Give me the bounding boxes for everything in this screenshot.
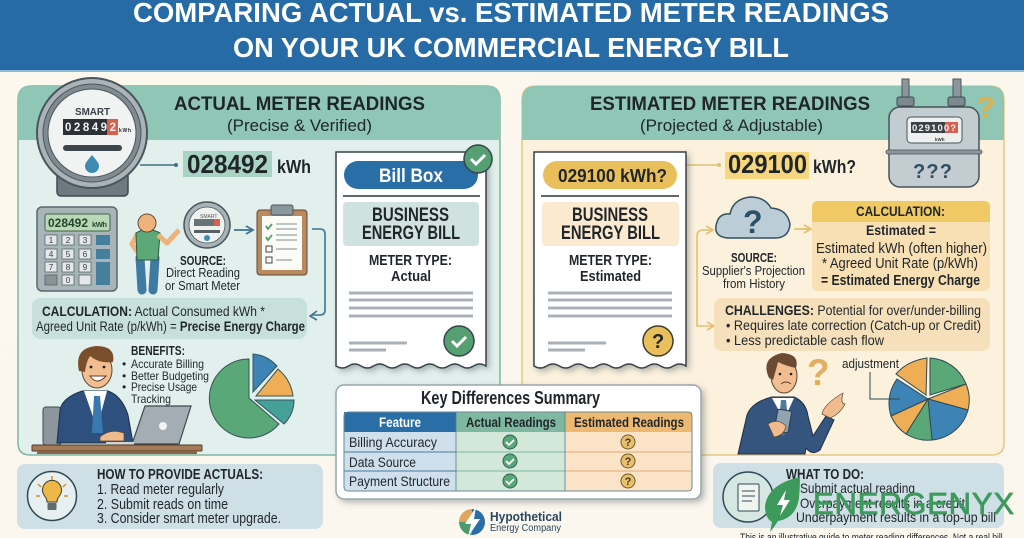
watermark: energenyx: ENERGENYX bbox=[813, 486, 1014, 521]
label: adjustment: adjustment bbox=[842, 357, 899, 371]
heading: summary: Key Differences Summary bbox=[421, 388, 600, 408]
title: ON YOUR UK COMMERCIAL ENERGY BILL bbox=[233, 32, 789, 63]
challenges box: CHALLENGES: Potential for over/under-billing bbox=[725, 302, 981, 318]
icon: calculator: 7 bbox=[49, 262, 54, 272]
bill: estimated bbox=[534, 152, 686, 368]
text: source estimated bbox=[702, 251, 805, 291]
text: what to do bbox=[786, 467, 996, 525]
icon: worried businessman bbox=[738, 353, 845, 454]
heading: actual: ACTUAL METER READINGS bbox=[174, 94, 425, 115]
pie chart: actual bbox=[209, 354, 294, 438]
icon: person reading meter bbox=[132, 214, 179, 290]
calculation box: actual bbox=[32, 298, 307, 339]
pill: bill box bbox=[344, 161, 478, 189]
icon: question mark: ? bbox=[977, 92, 995, 124]
text: meter type actual: METER TYPE: bbox=[369, 252, 452, 269]
block: bill title: BUSINESS bbox=[372, 205, 449, 226]
list: benefits: • bbox=[122, 380, 126, 394]
calculation box: actual: Agreed Unit Rate (p/kWh) = Precise Energy Charge bbox=[36, 319, 305, 334]
header banner bbox=[0, 0, 1024, 72]
logo: hypothetical energy company: Energy Company bbox=[490, 523, 561, 534]
icon: question badge: ? bbox=[652, 331, 664, 353]
list: benefits: • bbox=[122, 357, 126, 371]
icon: desk bbox=[32, 445, 202, 454]
watermark: energenyx bbox=[765, 477, 1014, 532]
text: how to provide actuals: HOW TO PROVIDE ACTUALS: bbox=[97, 467, 263, 483]
icon: clipboard bbox=[257, 205, 307, 275]
arrow: challenges to cloud bbox=[697, 226, 714, 330]
text: source estimated: SOURCE: bbox=[731, 251, 777, 265]
calculation box: estimated: CALCULATION: bbox=[856, 203, 945, 219]
text: source actual bbox=[165, 254, 240, 293]
icon: calculator: 6 bbox=[83, 249, 88, 259]
arrow: clipboard to calculation bbox=[310, 229, 325, 320]
table: comparison: ? bbox=[625, 476, 632, 488]
icon: small meter bbox=[184, 202, 230, 248]
list: benefits: Precise Usage bbox=[131, 380, 197, 394]
reading: estimated kWh: kWh? bbox=[813, 157, 856, 177]
text: what to do: WHAT TO DO: bbox=[786, 467, 864, 483]
icon: document and pen bbox=[723, 472, 773, 522]
text: how to provide actuals: 3. Consider smart meter upgrade. bbox=[97, 511, 281, 527]
challenges box bbox=[714, 298, 990, 351]
pie chart: estimated bbox=[870, 358, 969, 440]
table: comparison: Data Source bbox=[349, 454, 416, 470]
calculation box: estimated: * Agreed Unit Rate (p/kWh) bbox=[822, 256, 978, 272]
text: meter type estimated: Estimated bbox=[580, 268, 641, 285]
heading: actual: (Precise & Verified) bbox=[227, 116, 372, 135]
table: comparison: Estimated Readings bbox=[574, 414, 684, 430]
icon: smart meter: SMART bbox=[75, 106, 111, 118]
heading: estimated bbox=[590, 94, 870, 135]
calculation box: estimated bbox=[812, 201, 990, 291]
table: comparison: Payment Structure bbox=[349, 473, 450, 489]
calculation box: estimated: Estimated = bbox=[866, 222, 936, 238]
block: bill title bbox=[542, 202, 679, 246]
icon: smart meter: kWh bbox=[119, 128, 131, 134]
panel: key differences summary bbox=[336, 385, 701, 499]
reading: estimated kWh bbox=[725, 149, 856, 179]
table: comparison: Actual Readings bbox=[466, 414, 556, 430]
icon: gas meter bbox=[886, 79, 982, 187]
title bbox=[133, 0, 889, 63]
list: benefits: • bbox=[122, 369, 126, 383]
text: what to do: Overpayment results in a credit bbox=[800, 495, 965, 511]
text: how to provide actuals: 1. Read meter regularly bbox=[97, 482, 225, 498]
icon: small meter: SMART bbox=[200, 214, 217, 220]
list: benefits: Better Budgeting bbox=[131, 369, 209, 383]
pill: estimated kWh bbox=[543, 161, 677, 189]
icon: check badge bottom bbox=[444, 326, 474, 356]
table: comparison bbox=[344, 412, 692, 491]
icon: calculator: 8 bbox=[66, 262, 71, 272]
block: bill title bbox=[343, 202, 479, 246]
icon: calculator: 5 bbox=[66, 249, 71, 259]
challenges box: • Less predictable cash flow bbox=[726, 332, 885, 348]
list: benefits: Tracking bbox=[131, 392, 171, 406]
icon: calculator: 2 bbox=[66, 235, 71, 245]
icon: calculator: 0 bbox=[66, 275, 71, 285]
text: what to do: • bbox=[786, 480, 791, 496]
text: source estimated: from History bbox=[723, 277, 786, 291]
reading: actual kWh: kWh bbox=[277, 157, 311, 177]
panel: actual meter readings bbox=[18, 78, 500, 455]
icon: leaf bolt bbox=[765, 477, 800, 532]
logo: hypothetical energy company bbox=[459, 507, 562, 537]
arrow: meter to clipboard bbox=[234, 226, 253, 234]
icon: smart meter: 028492 bbox=[65, 122, 116, 134]
text: source actual: Direct Reading bbox=[166, 266, 240, 280]
heading: actual bbox=[174, 94, 425, 135]
icon: calculator: 9 bbox=[83, 262, 88, 272]
icon: gas meter: 029100? bbox=[912, 123, 956, 134]
text: what to do: Submit actual reading bbox=[800, 480, 915, 496]
reading: actual kWh: 028492 bbox=[187, 149, 268, 179]
block: bill title: BUSINESS bbox=[572, 205, 648, 226]
icon: cloud: ? bbox=[743, 204, 763, 240]
text: how to provide actuals bbox=[97, 467, 281, 527]
icon: laptop bbox=[106, 406, 191, 445]
block: bill title: ENERGY BILL bbox=[362, 223, 460, 244]
list: benefits: BENEFITS: bbox=[131, 344, 185, 358]
heading: estimated: ESTIMATED METER READINGS bbox=[590, 94, 870, 115]
connector: meter to reading bbox=[140, 163, 178, 167]
icon: calculator: 4 bbox=[49, 249, 54, 259]
icon: check badge top bbox=[464, 145, 492, 173]
text: source actual: or Smart Meter bbox=[165, 279, 240, 293]
calculation box: estimated: = Estimated Energy Charge bbox=[821, 273, 980, 289]
panel: what to do bbox=[713, 463, 1004, 528]
table: comparison: Billing Accuracy bbox=[349, 434, 437, 450]
icon: smart meter bbox=[37, 78, 147, 196]
icon: calculator: 1 bbox=[49, 235, 54, 245]
icon: businessman at laptop bbox=[43, 346, 133, 445]
list: benefits bbox=[122, 344, 209, 406]
arrow: cloud to calculation bbox=[794, 225, 811, 233]
table: comparison: ? bbox=[625, 437, 632, 449]
icon: calculator: 3 bbox=[83, 235, 88, 245]
text: how to provide actuals: 2. Submit reads on time bbox=[97, 497, 228, 513]
heading: estimated: (Projected & Adjustable) bbox=[640, 116, 823, 135]
text: what to do: Underpayment results in a top-up bill bbox=[796, 509, 996, 525]
text: what to do: • bbox=[786, 495, 791, 511]
pill: bill box: Bill Box bbox=[379, 166, 443, 187]
text: meter type actual: Actual bbox=[391, 268, 431, 285]
text: meter type estimated bbox=[569, 252, 652, 285]
calculation box: actual: CALCULATION: Actual Consumed kWh * bbox=[42, 304, 266, 319]
pill: estimated kWh: 029100 kWh? bbox=[558, 166, 667, 186]
connector: bill to estimated reading bbox=[687, 163, 721, 167]
reading: actual kWh bbox=[183, 149, 311, 179]
icon: question mark worried: ? bbox=[807, 352, 830, 393]
icon: question badge bbox=[643, 326, 673, 356]
text: source estimated: Supplier's Projection bbox=[702, 264, 805, 278]
icon: light bulb bbox=[28, 472, 76, 520]
list: benefits: Accurate Billing bbox=[131, 357, 204, 371]
table: comparison: Feature bbox=[379, 414, 421, 430]
bill: actual bbox=[336, 145, 492, 368]
calculation box: estimated: Estimated kWh (often higher) bbox=[816, 241, 987, 257]
icon: gas meter: kWh bbox=[935, 137, 945, 142]
icon: calculator: kWh bbox=[92, 220, 107, 229]
text: meter type estimated: METER TYPE: bbox=[569, 252, 652, 269]
logo: hypothetical energy company: Hypothetical bbox=[490, 509, 562, 524]
challenges box: • Requires late correction (Catch-up or Credit) bbox=[726, 317, 981, 333]
reading: estimated kWh: 029100 bbox=[728, 149, 807, 179]
icon: calculator bbox=[37, 207, 117, 291]
block: bill title: ENERGY BILL bbox=[561, 223, 660, 244]
panel: estimated meter readings bbox=[522, 79, 1004, 455]
icon: cloud bbox=[716, 197, 790, 240]
icon: calculator: 028492 bbox=[48, 216, 88, 230]
text: meter type actual bbox=[369, 252, 452, 285]
table: comparison: ? bbox=[625, 456, 632, 468]
icon: gas meter: ??? bbox=[913, 161, 952, 183]
text: source actual: SOURCE: bbox=[180, 254, 226, 268]
panel: how to provide actuals bbox=[17, 464, 323, 529]
